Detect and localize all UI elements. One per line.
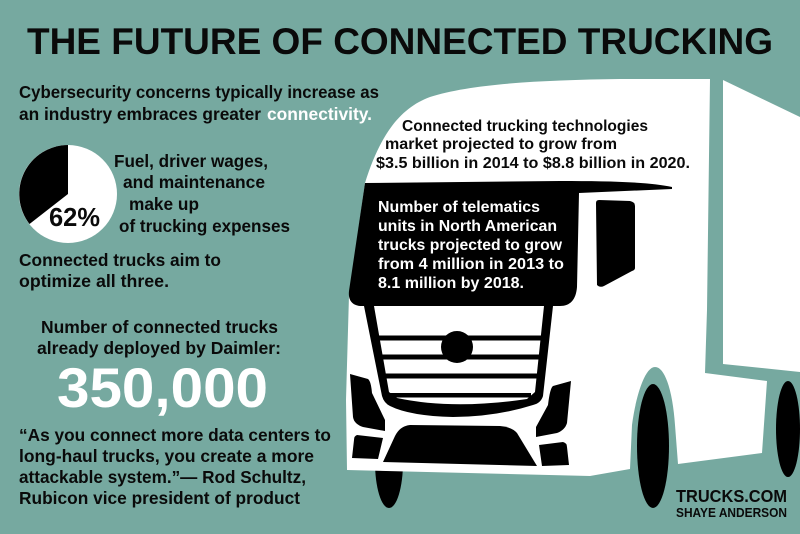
- quote: Rubicon vice president of product: [19, 488, 300, 508]
- grille bars: [378, 336, 542, 398]
- expenses text: and maintenance: [123, 172, 265, 192]
- rear wheel: [776, 381, 800, 477]
- market projection text: [376, 118, 690, 172]
- front left wheel: [375, 416, 403, 508]
- right headlight: [536, 381, 571, 437]
- telematics text: [378, 199, 564, 292]
- front right wheel: [637, 384, 669, 508]
- intro text: an industry embraces greater: [19, 104, 261, 124]
- trailer: [723, 80, 800, 372]
- telematics text: from 4 million in 2013 to: [378, 256, 564, 273]
- quote: “As you connect more data centers to: [19, 425, 331, 445]
- telematics text: Number of telematics: [378, 199, 540, 216]
- market projection text: Connected trucking technologies: [402, 118, 648, 135]
- intro text: Cybersecurity concerns typically increase as: [19, 82, 379, 102]
- cab body: [346, 79, 767, 476]
- expenses text: [114, 151, 290, 236]
- quote: long-haul trucks, you create a more: [19, 446, 314, 466]
- deployed trucks stat: 350,000: [57, 356, 268, 419]
- grille frame: [364, 306, 553, 417]
- left fog lamp: [352, 435, 383, 459]
- pie chart: 62%: 62%: [49, 202, 100, 232]
- pie chart: 62%: [19, 145, 117, 243]
- credits: SHAYE ANDERSON: [676, 505, 787, 520]
- truck illustration: [346, 79, 800, 508]
- left headlight: [350, 374, 385, 431]
- deployed trucks stat: already deployed by Daimler:: [37, 338, 281, 358]
- windshield visor: [349, 181, 672, 306]
- optimize text: [19, 250, 221, 291]
- intro text: [19, 82, 379, 124]
- deployed trucks stat: [37, 317, 281, 419]
- expenses text: of trucking expenses: [119, 216, 290, 236]
- intro text: connectivity.: [267, 104, 372, 124]
- expenses text: make up: [129, 194, 199, 214]
- optimize text: optimize all three.: [19, 271, 169, 291]
- credits: TRUCKS.COM: [676, 486, 787, 506]
- expenses text: Fuel, driver wages,: [114, 151, 268, 171]
- optimize text: Connected trucks aim to: [19, 250, 221, 270]
- deployed trucks stat: Number of connected trucks: [41, 317, 278, 337]
- telematics text: units in North American: [378, 218, 557, 235]
- right fog lamp: [539, 442, 569, 466]
- quote: attackable system.”— Rod Schultz,: [19, 467, 306, 487]
- market projection text: market projected to grow from: [385, 136, 617, 153]
- side window: [596, 200, 635, 287]
- title: THE FUTURE OF CONNECTED TRUCKING: [27, 21, 773, 62]
- telematics text: trucks projected to grow: [378, 237, 563, 254]
- grille badge: [441, 331, 473, 363]
- market projection text: $3.5 billion in 2014 to $8.8 billion in 2020.: [376, 155, 690, 172]
- bumper intake: [383, 425, 537, 466]
- credits: [676, 486, 787, 520]
- telematics text: 8.1 million by 2018.: [378, 275, 524, 292]
- quote: [19, 425, 331, 508]
